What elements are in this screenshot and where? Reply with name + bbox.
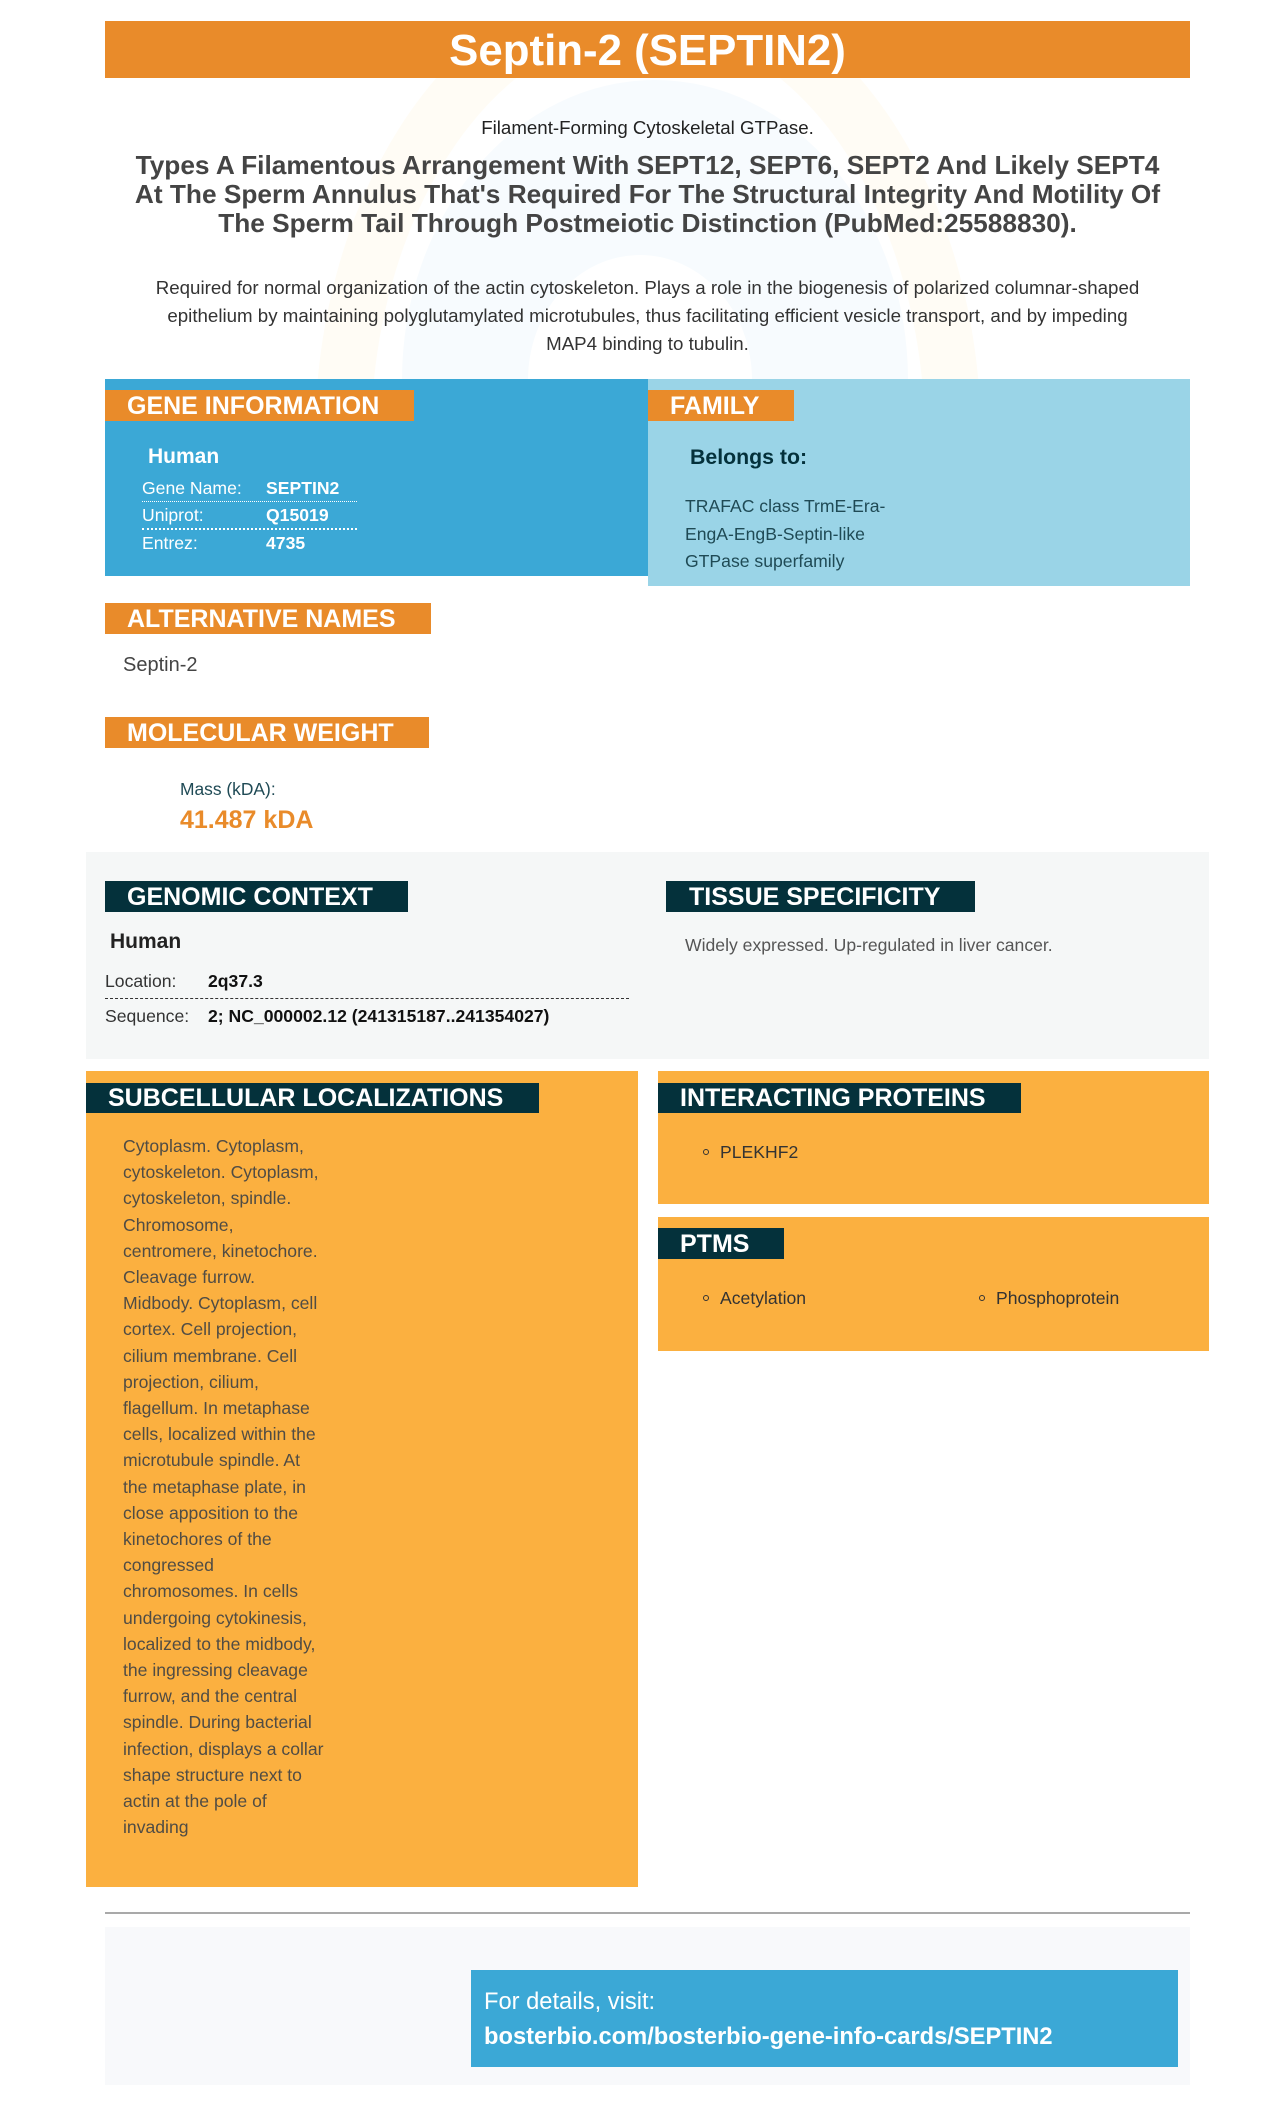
localization text: cilium membrane. Cell	[123, 1346, 297, 1366]
localization text: infection, displays a collar	[123, 1739, 323, 1759]
heading: tissue specificity: TISSUE SPECIFICITY	[689, 883, 940, 911]
localization text: the metaphase plate, in	[123, 1477, 306, 1497]
localization text: kinetochores of the	[123, 1529, 272, 1549]
localization text: microtubule spindle. At	[123, 1450, 300, 1470]
localization text: cells, localized within the	[123, 1424, 316, 1444]
description text: Required for normal organization of the actin cytoskeleton. Plays a role in the biogenesis of polarized columnar-shaped	[156, 277, 1139, 298]
gene name row: SEPTIN2	[266, 478, 339, 498]
localization text: congressed	[123, 1555, 214, 1575]
localization text: undergoing cytokinesis,	[123, 1608, 307, 1628]
callout: details link	[471, 1970, 1178, 2067]
species label: Human	[148, 445, 219, 468]
alternative names text: Septin-2	[123, 654, 198, 676]
family text	[685, 496, 885, 571]
mass label: Mass (kDA):	[180, 779, 276, 799]
belongs to label: Belongs to:	[690, 445, 807, 469]
heading: interacting proteins: INTERACTING PROTEINS	[680, 1084, 986, 1112]
main function heading: At The Sperm Annulus That's Required For The Structural Integrity And Motility Of	[135, 179, 1160, 209]
localization text: Chromosome,	[123, 1215, 234, 1235]
ptm item: phosphoprotein: Phosphoprotein	[996, 1288, 1119, 1308]
localization text: actin at the pole of	[123, 1791, 267, 1811]
panel: gene information	[105, 379, 648, 576]
localization text: invading	[123, 1817, 189, 1837]
panel: footer	[105, 1927, 1190, 2085]
entrez row	[142, 533, 305, 553]
callout label: For details, visit:	[484, 1989, 655, 2015]
localization text	[123, 1136, 324, 1837]
protein list item: PLEKHF2	[720, 1142, 798, 1162]
family text: EngA-EngB-Septin-like	[685, 524, 865, 544]
uniprot row: Q15019	[266, 505, 329, 525]
localization text: cytoskeleton. Cytoplasm,	[123, 1162, 319, 1182]
sequence row: Sequence:	[105, 1006, 189, 1026]
heading: ptms: PTMS	[680, 1230, 749, 1258]
heading: family	[648, 390, 794, 421]
entrez row: 4735	[266, 533, 305, 553]
family text: TRAFAC class TrmE-Era-	[685, 496, 885, 516]
background watermark logo	[318, 78, 978, 379]
panel: genomic context and tissue specificity: 2; NC_000002.12 (241315187..241354027)	[208, 1006, 549, 1026]
localization text: Midbody. Cytoplasm, cell	[123, 1293, 317, 1313]
localization text: flagellum. In metaphase	[123, 1398, 310, 1418]
heading: subcellular localizations: SUBCELLULAR LOCALIZATIONS	[108, 1084, 503, 1112]
heading: molecular weight: MOLECULAR WEIGHT	[127, 719, 394, 747]
heading: alternative names: ALTERNATIVE NAMES	[127, 605, 396, 633]
sequence row	[105, 1006, 549, 1026]
main function heading: Types A Filamentous Arrangement With SEPT12, SEPT6, SEPT2 And Likely SEPT4	[136, 150, 1159, 180]
main function heading	[135, 150, 1160, 238]
species label: Human	[110, 930, 181, 953]
panel: subcellular localizations	[86, 1071, 638, 1887]
heading: ptms	[658, 1228, 784, 1259]
localization text: chromosomes. In cells	[123, 1581, 298, 1601]
uniprot row: Uniprot:	[142, 505, 204, 525]
location row: Location:	[105, 971, 176, 991]
localization text: cortex. Cell projection,	[123, 1319, 297, 1339]
uniprot row	[142, 502, 357, 530]
mass value: 41.487 kDA	[180, 806, 313, 834]
title banner: Septin-2 (SEPTIN2)	[449, 26, 846, 75]
family text: GTPase superfamily	[685, 551, 844, 571]
localization text: the ingressing cleavage	[123, 1660, 308, 1680]
localization text: projection, cilium,	[123, 1372, 259, 1392]
localization text: shape structure next to	[123, 1765, 302, 1785]
gene name row	[142, 475, 357, 502]
title banner	[105, 21, 1190, 78]
panel: interacting proteins	[658, 1071, 1209, 1204]
localization text: furrow, and the central	[123, 1686, 297, 1706]
entrez row: Entrez:	[142, 533, 198, 553]
heading: genomic context: GENOMIC CONTEXT	[127, 883, 373, 911]
panel: family	[648, 379, 1190, 586]
location row: 2q37.3	[208, 971, 263, 991]
description text: MAP4 binding to tubulin.	[546, 333, 749, 354]
localization text: close apposition to the	[123, 1503, 298, 1523]
localization text: Cytoplasm. Cytoplasm,	[123, 1136, 304, 1156]
localization text: localized to the midbody,	[123, 1634, 315, 1654]
localization text: cytoskeleton, spindle.	[123, 1188, 291, 1208]
panel: genomic context and tissue specificity	[86, 852, 1209, 1059]
heading: family: FAMILY	[670, 392, 759, 420]
gene name row: Gene Name:	[142, 478, 242, 498]
main function heading: The Sperm Tail Through Postmeiotic Distinction (PubMed:25588830).	[218, 208, 1077, 238]
localization text: spindle. During bacterial	[123, 1712, 312, 1732]
ptm item: acetylation: Acetylation	[720, 1288, 806, 1308]
localization text: centromere, kinetochore.	[123, 1241, 318, 1261]
mass block	[180, 779, 313, 834]
heading: gene information: GENE INFORMATION	[127, 392, 379, 420]
description text: epithelium by maintaining polyglutamylated microtubules, thus facilitating efficient vesicle transport, and by impeding	[167, 305, 1128, 326]
localization text: Cleavage furrow.	[123, 1267, 255, 1287]
callout url: bosterbio.com/bosterbio-gene-info-cards/SEPTIN2	[484, 2024, 1053, 2050]
description text	[156, 277, 1139, 354]
subtitle: Filament-Forming Cytoskeletal GTPase.	[481, 117, 814, 138]
tissue specificity text: Widely expressed. Up-regulated in liver cancer.	[685, 935, 1053, 955]
panel: ptms	[658, 1217, 1209, 1351]
location row	[105, 968, 629, 999]
